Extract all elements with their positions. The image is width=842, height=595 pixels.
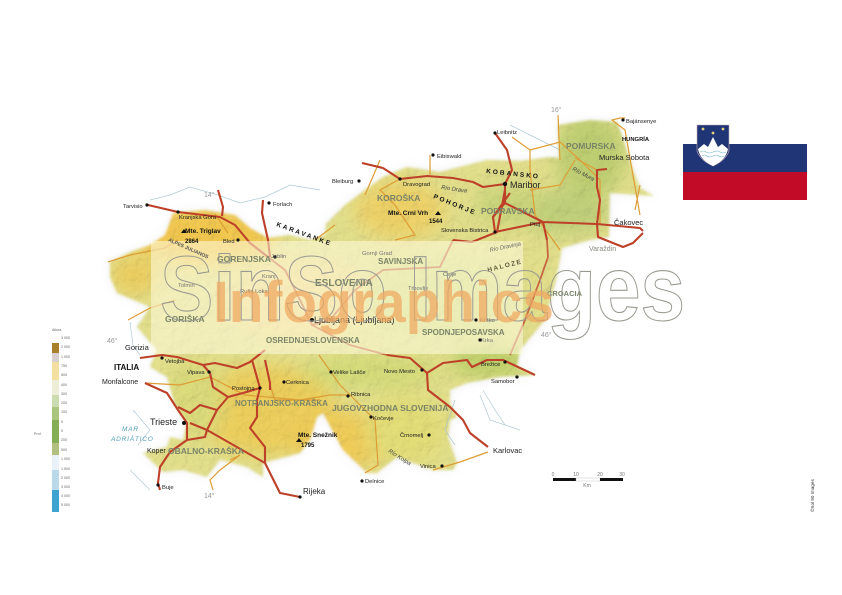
region labels: ESLOVENIA (315, 278, 373, 289)
city labels: Bajánsenye (626, 119, 656, 125)
city labels: Vetojba (165, 359, 185, 365)
mountain labels: Mte. Crni Vrh (388, 210, 428, 217)
city labels: Krško (480, 318, 495, 324)
elevation legend: 3 000 (61, 485, 70, 489)
sea and river labels: Río Drava (441, 185, 468, 195)
city labels (102, 119, 656, 496)
city labels: Rijeka (303, 487, 326, 496)
city labels: Trbovlje (408, 286, 428, 292)
elevation legend: 3 000 (61, 336, 70, 340)
mountain labels: KARAVANKE (275, 221, 333, 248)
city labels: Karlovac (493, 446, 522, 455)
mountain labels: 2864 (185, 239, 199, 245)
watermark band (151, 241, 523, 354)
graticule labels (107, 106, 562, 500)
credit: ©Sol 90 Images (809, 479, 815, 512)
coat of arms (697, 125, 729, 166)
sea and river labels: MAR (122, 426, 139, 433)
city labels: Jablin (271, 254, 286, 260)
city labels: Ptuj (530, 222, 540, 228)
city labels: Leibnitz (497, 130, 517, 136)
city labels: Murska Sobota (599, 153, 650, 162)
city labels: Eibiswald (437, 154, 462, 160)
elevation legend: 1 500 (61, 467, 70, 471)
city labels: Ribnica (351, 392, 371, 398)
city labels: ITALIA (114, 363, 139, 372)
scale bar: 30 (619, 472, 625, 478)
sea and river labels: Río Mura (571, 166, 596, 183)
elevation legend: 200 (61, 401, 67, 405)
city labels: Maribor (510, 180, 541, 190)
city labels: Koper (147, 448, 166, 455)
elevation legend: 200 (61, 438, 67, 442)
mountain labels: ALPES JULIANOS (167, 237, 210, 261)
scale bar: 20 (597, 472, 603, 478)
city labels: Varaždin (589, 246, 616, 253)
city labels: Ljubljana (Ljubljana) (314, 315, 395, 325)
sea and river labels: Río Dravinja (489, 241, 522, 254)
city labels: Postojna (232, 386, 255, 392)
region labels: NOTRANJSKO-KRAŠKA (235, 399, 328, 408)
elevation legend: 0 (61, 429, 63, 433)
city dots (145, 118, 625, 499)
graticule labels: 14° (204, 191, 215, 199)
city labels: Trieste (150, 417, 177, 427)
elevation legend: Prof. (34, 432, 42, 436)
region labels: OBALNO-KRAŠKA (168, 445, 244, 456)
sea and river labels (110, 166, 596, 468)
elevation legend: 500 (61, 373, 67, 377)
elevation legend: 400 (61, 383, 67, 387)
city labels: Kranjska Gora (179, 215, 217, 221)
region labels (165, 141, 616, 456)
city labels: Tolmin (178, 283, 195, 289)
city labels: Velike Lašče (333, 370, 366, 376)
region labels: OSREDNJESLOVENSKA (266, 336, 360, 345)
region labels: GORIŠKA (165, 313, 205, 324)
region labels: SAVINJSKA (378, 257, 423, 266)
mountain labels: Mte. Snežnik (298, 432, 338, 439)
elevation legend: 2 000 (61, 345, 70, 349)
city labels: Kranj (262, 274, 276, 280)
city labels: Monfalcone (102, 379, 138, 386)
graticule labels: 46° (541, 331, 552, 339)
scale bar: 0 (552, 472, 555, 478)
region labels: KOROŠKA (377, 192, 420, 203)
watermark: outlined word: SinSo Images (160, 238, 685, 340)
city labels: Vinica (420, 464, 436, 470)
mountain labels: HALOZE (487, 259, 523, 274)
city labels: Gornji Grad (362, 251, 392, 257)
elevation legend: 5 000 (61, 503, 70, 507)
graticule labels: 16° (551, 106, 562, 114)
elevation legend (34, 328, 70, 512)
map: terrain (108, 118, 654, 478)
city labels: Novo Mesto (384, 369, 415, 375)
main roads (140, 133, 643, 497)
graticule labels: 14° (204, 492, 215, 500)
mountain labels: 1795 (301, 443, 315, 449)
mountain labels (167, 168, 540, 449)
city labels: Forlach (273, 202, 292, 208)
flag of Slovenia (683, 125, 807, 200)
rivers and borders (130, 125, 560, 490)
elevation legend: Altura (52, 328, 61, 332)
scale bar: Km (583, 483, 591, 489)
city labels: Buje (162, 485, 174, 491)
city labels: Tarvisio (123, 204, 143, 210)
map: shadow around the country (110, 120, 654, 477)
elevation legend: 300 (61, 392, 67, 396)
elevation legend: 1 000 (61, 355, 70, 359)
region labels: JUGOVZHODNA SLOVENIJA (332, 403, 448, 413)
city labels: Krka (481, 338, 494, 344)
watermark: orange word: Infographics (213, 270, 554, 335)
elevation legend: 0 (61, 420, 63, 424)
region labels: POMURSKA (566, 141, 616, 151)
mountain labels: POHORJE (432, 193, 477, 217)
city labels: Delnice (365, 479, 384, 485)
elevation legend: 500 (61, 448, 67, 452)
scale bar: 10 (573, 472, 579, 478)
city labels: Vipava (187, 370, 205, 376)
city labels: HUNGRÍA (622, 135, 650, 143)
mountain labels: 1544 (429, 219, 443, 225)
city labels: Dravograd (403, 182, 430, 188)
region labels: CROACIA (547, 289, 583, 298)
city labels: Čakovec (614, 218, 643, 227)
mountain labels: KOBANSKO (486, 168, 540, 181)
region labels: SPODNJEPOSAVSKA (422, 328, 505, 337)
city labels: Gorizia (125, 343, 150, 352)
city labels: Cerknica (286, 380, 310, 386)
sea and river labels: Río Kolpa (387, 449, 412, 468)
city labels: Ruše Loka (240, 289, 268, 295)
city labels: Slovenska Bistrica (441, 228, 489, 234)
city labels: Bleiburg (332, 179, 353, 185)
elevation legend: 2 000 (61, 476, 70, 480)
city labels: Samobor (491, 379, 515, 385)
sea and river labels: ADRIÁTICO (110, 434, 154, 443)
city labels: Kočevje (373, 416, 394, 422)
elevation legend: 100 (61, 410, 67, 414)
scale bar (552, 472, 625, 489)
region labels: GORENJSKA (217, 254, 271, 264)
city labels: Črnomelj (400, 432, 423, 439)
region labels: PODRAVSKA (481, 206, 535, 216)
city labels: Bled (223, 239, 235, 245)
elevation legend: 4 000 (61, 494, 70, 498)
secondary roads (108, 115, 640, 490)
city labels: Celje (443, 272, 456, 278)
elevation legend: 1 000 (61, 457, 70, 461)
city labels: Brežice (481, 362, 500, 368)
roads under the watermark (268, 240, 548, 355)
mountain labels: Mte. Triglav (185, 228, 221, 235)
graticule labels: 46° (107, 337, 118, 345)
elevation legend: 750 (61, 364, 67, 368)
